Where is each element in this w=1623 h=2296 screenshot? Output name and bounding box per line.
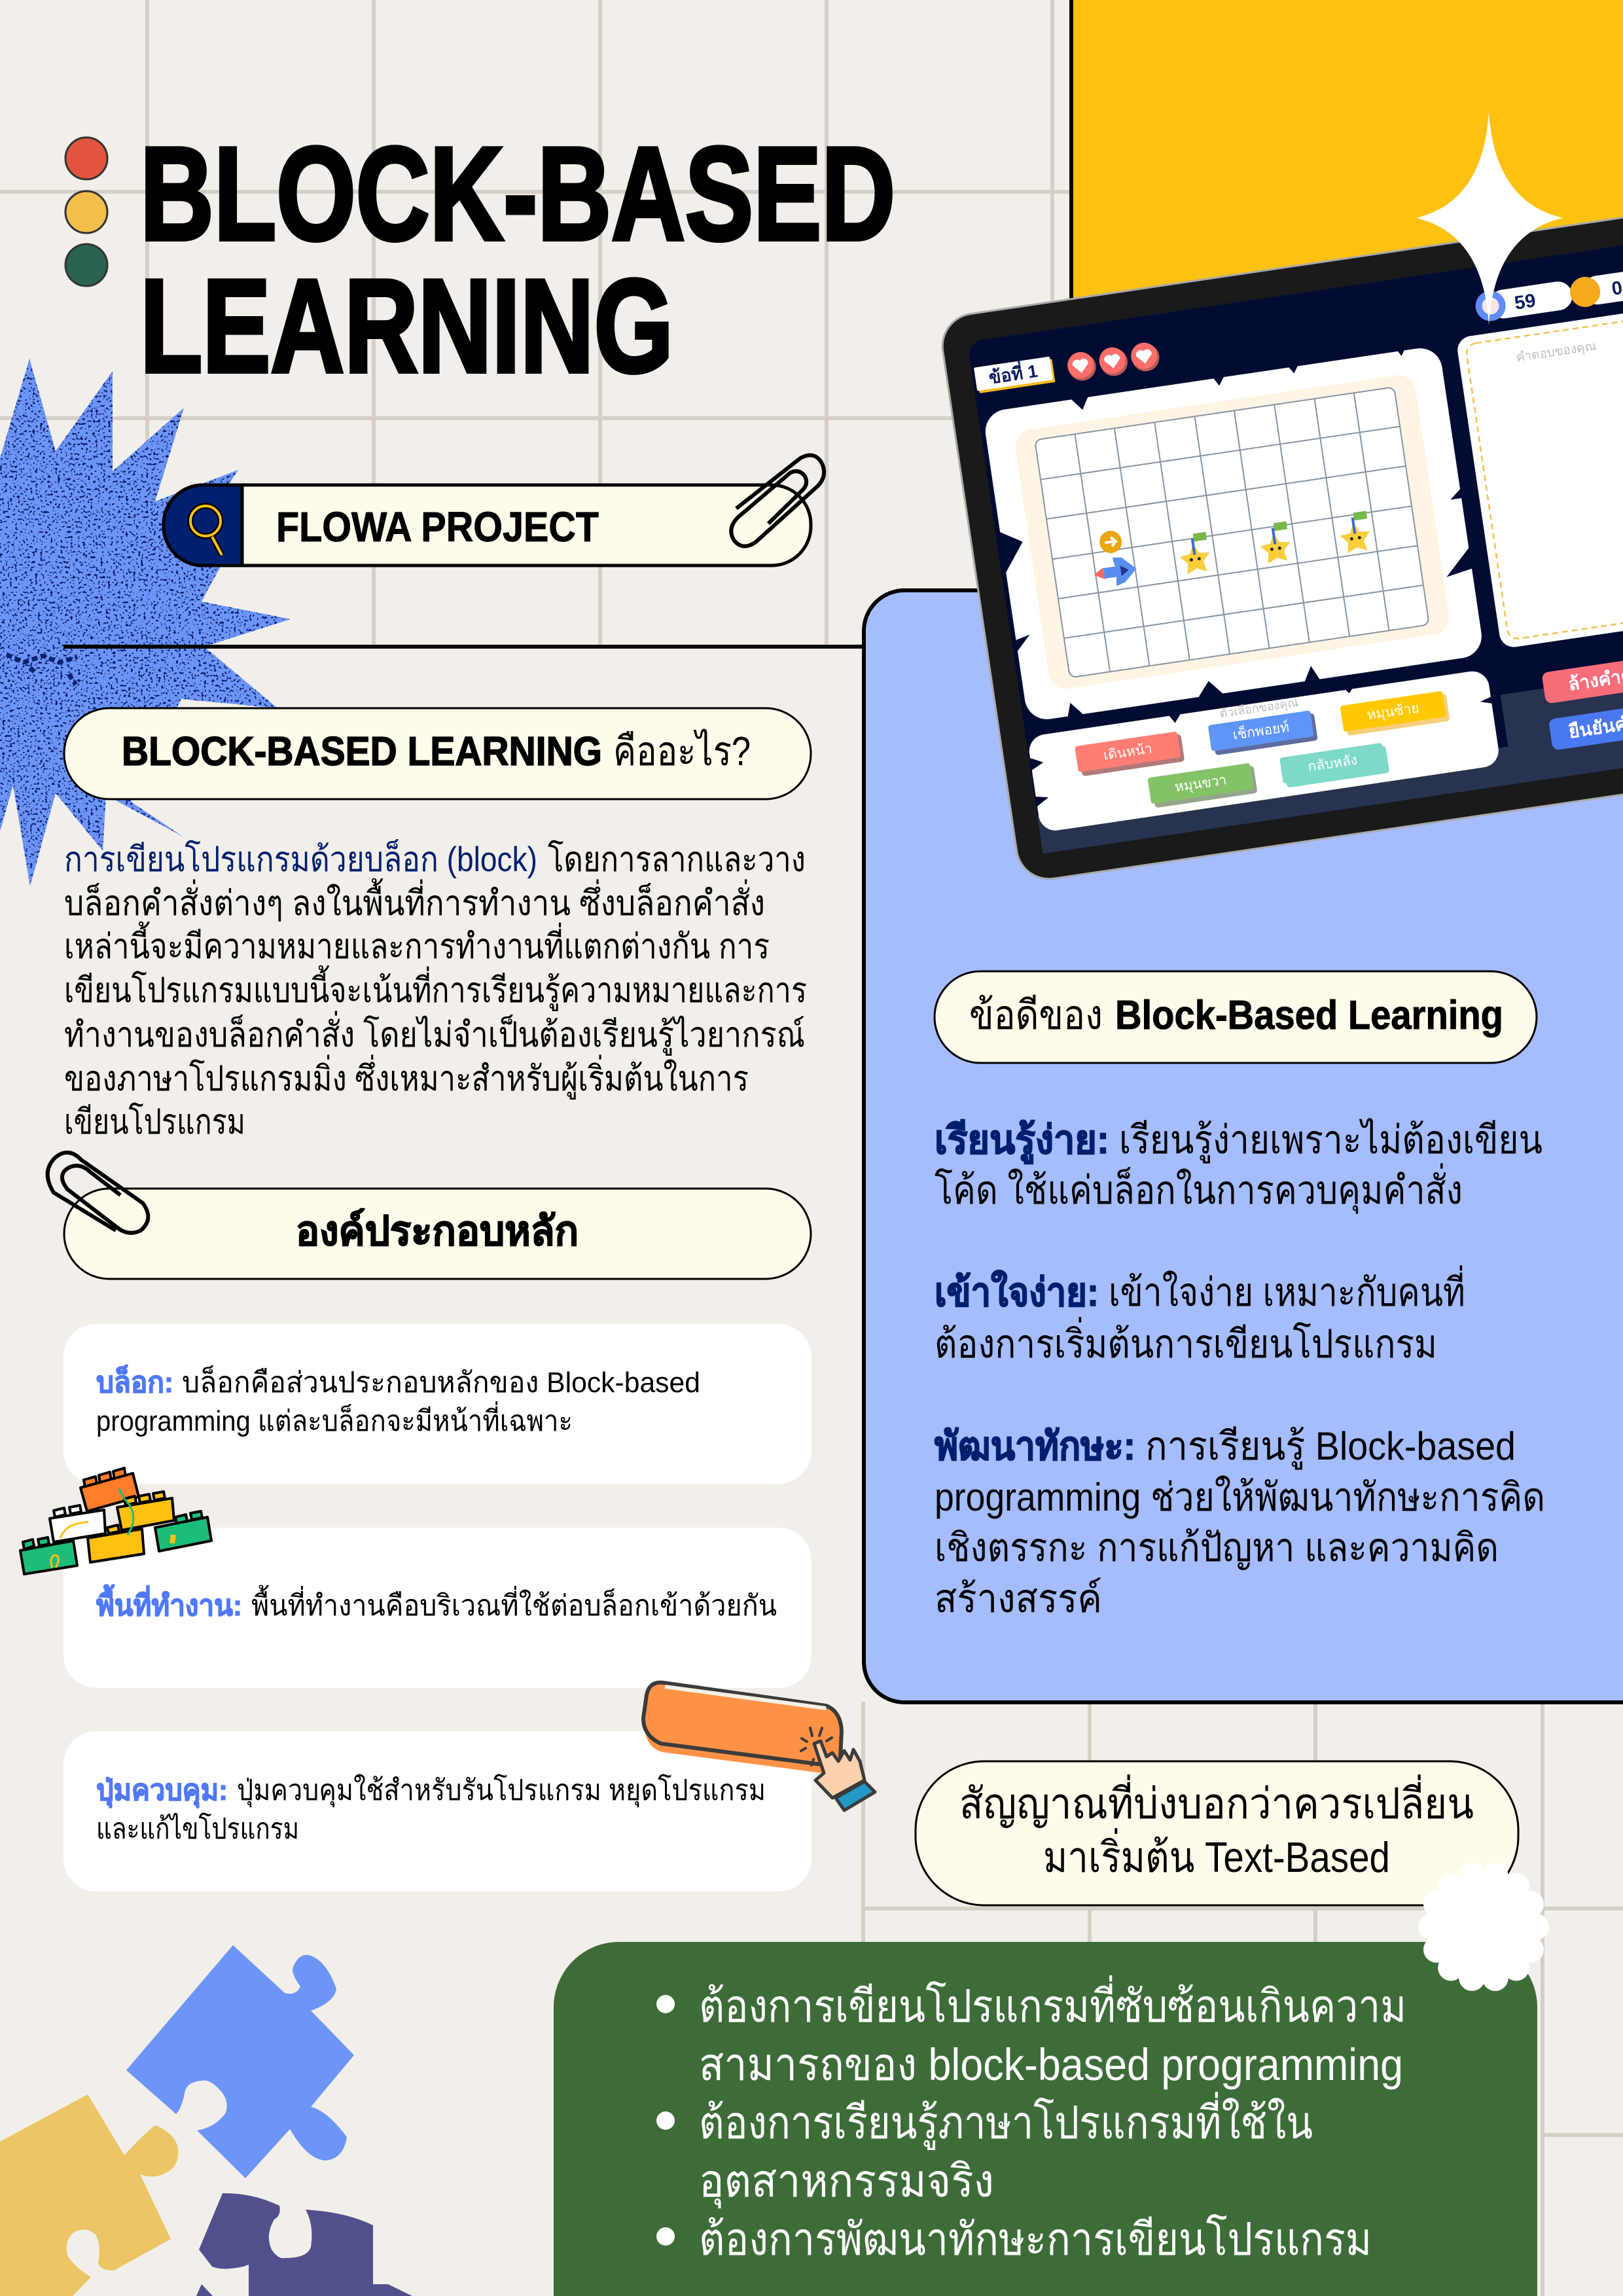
icon: star flag 3 <box>1337 511 1372 554</box>
advantage: develop skills: พัฒนาทักษะ: <box>935 1424 1135 1468</box>
option buttons: กลับหลัง <box>1307 753 1358 775</box>
divider line <box>63 645 865 649</box>
heading: signs to switch to text-based: สัญญาณที่บ่งบอกว่าควรเปลี่ยน <box>959 1774 1474 1828</box>
puzzle piece: blue <box>126 1945 354 2178</box>
title <box>140 120 895 401</box>
icon: rocket and arrow <box>1088 528 1139 589</box>
green panel: signs list: สามารถของ block-based programming <box>699 2039 1403 2090</box>
advantage: develop skills: สร้างสรรค์ <box>935 1577 1102 1621</box>
tablet mockup <box>938 177 1623 884</box>
timer and coin: 59 <box>1513 290 1537 314</box>
card: workspace <box>63 1528 812 1688</box>
yellow corner panel <box>1071 0 1623 399</box>
green panel: signs list: อุตสาหกรรมจริง <box>699 2156 994 2209</box>
brick: yellow top <box>117 1492 174 1530</box>
advantage: easy to learn: โค้ด ใช้แค่บล็อกในการควบคุมคำสั่ง <box>935 1163 1463 1214</box>
card: controls: ปุ่มควบคุมใช้สำหรับรันโปรแกรม หยุดโปรแกรม <box>237 1774 766 1808</box>
option buttons <box>1075 691 1456 818</box>
brick squiggles <box>51 1489 173 1568</box>
grid <box>1035 387 1429 677</box>
title: LEARNING <box>140 252 673 401</box>
brick: green right <box>155 1511 211 1551</box>
brick: green left <box>20 1537 77 1574</box>
description paragraph: เหล่านี้จะมีความหมายและการทำงานที่แตกต่างกัน การ <box>64 922 770 966</box>
heading: what is block-based learning: BLOCK-BASED LEARNING <box>122 729 602 774</box>
blue panel: advantages <box>864 590 1623 1702</box>
description paragraph: ของภาษาโปรแกรมมิ่ง ซึ่งเหมาะสำหรับผู้เริ่มต้นในการ <box>64 1054 749 1100</box>
blue starburst with speckled texture <box>0 359 291 886</box>
card: block: บล็อกคือส่วนประกอบหลักของ Block-based <box>182 1365 700 1399</box>
options panel: ตัวเลือกของคุณ <box>1219 696 1299 721</box>
hearts <box>1065 340 1161 383</box>
card: controls: และแก้ไขโปรแกรม <box>96 1812 299 1845</box>
card: block <box>63 1324 812 1484</box>
icon: star flag 1 <box>1177 532 1212 575</box>
brick: white <box>50 1505 105 1542</box>
heading: advantages of block-based learning: Block-Based Learning <box>1115 993 1503 1038</box>
heading: advantages of block-based learning: ข้อดีของ <box>969 993 1103 1038</box>
advantage: easy to understand: เข้าใจง่าย: <box>935 1270 1099 1314</box>
card: block: บล็อก: <box>96 1365 173 1399</box>
card: workspace: พื้นที่ทำงาน: <box>96 1584 242 1622</box>
search bar: FLOWA PROJECT: FLOWA PROJECT <box>276 503 599 550</box>
icon: white sparkle <box>1416 111 1563 325</box>
options panel <box>1026 664 1503 833</box>
description paragraph: บล็อกคำสั่งต่างๆ ลงในพื้นที่การทำงาน ซึ่งบล็อกคำสั่ง <box>64 878 765 923</box>
icon: paperclip left <box>48 1153 148 1233</box>
brick: orange <box>80 1468 139 1511</box>
puzzle piece: yellow <box>0 2094 178 2296</box>
game board panel <box>980 342 1488 725</box>
heading: main components <box>64 1189 811 1279</box>
icon: magnifier <box>190 506 222 555</box>
heading: signs to switch to text-based <box>916 1761 1518 1905</box>
advantage: easy to understand <box>935 1265 1465 1366</box>
card: workspace: พื้นที่ทำงานคือบริเวณที่ใช้ต่อบล็อกเข้าด้วยกัน <box>251 1585 777 1622</box>
advantage: easy to understand: ต้องการเริ่มต้นการเขียนโปรแกรม <box>935 1317 1437 1366</box>
option buttons: เช็กพอยท์ <box>1232 717 1290 743</box>
icon: toy bricks <box>20 1468 211 1574</box>
description paragraph: ทำงานของบล็อกคำสั่ง โดยไม่จำเป็นต้องเรียนรู้ไวยากรณ์ <box>64 1011 805 1056</box>
cuff <box>836 1782 875 1810</box>
advantage: easy to learn: เรียนรู้ง่าย: <box>935 1118 1109 1164</box>
heading: advantages of block-based learning <box>935 971 1537 1063</box>
title: BLOCK-BASED <box>140 120 895 268</box>
top bar: level tag <box>974 355 1056 393</box>
heading: what is block-based learning: คืออะไร? <box>613 728 751 774</box>
description paragraph <box>64 838 807 1141</box>
option buttons: หมุนซ้าย <box>1366 700 1420 724</box>
description paragraph: โดยการลากและวาง <box>548 840 806 879</box>
brick: yellow bottom <box>88 1525 144 1562</box>
advantage: develop skills: เชิงตรรกะ การแก้ปัญหา และความคิด <box>935 1526 1499 1570</box>
advantage: easy to learn: เรียนรู้ง่ายเพราะไม่ต้องเขียน <box>1119 1117 1543 1164</box>
green panel: signs list: ต้องการเขียนโปรแกรมที่ซับซ้อนเกินความ <box>699 1975 1406 2032</box>
description paragraph: เขียนโปรแกรม <box>64 1102 245 1141</box>
option buttons: หมุนขวา <box>1173 772 1228 796</box>
card: block: programming แต่ละบล็อกจะมีหน้าที่เฉพาะ <box>96 1401 573 1437</box>
puzzle piece: navy <box>196 2193 412 2296</box>
advantage: develop skills: การเรียนรู้ Block-based <box>1145 1424 1516 1470</box>
heading: what is block-based learning <box>64 708 811 799</box>
description paragraph: การเขียนโปรแกรมด้วยบล็อก (block) <box>64 838 537 879</box>
hand <box>814 1741 865 1798</box>
icon: paperclip top <box>731 456 824 547</box>
card: controls <box>63 1731 812 1892</box>
description paragraph: เขียนโปรแกรมแบบนี้จะเน้นที่การเรียนรู้ความหมายและการ <box>64 965 807 1011</box>
search bar: FLOWA PROJECT <box>164 485 811 565</box>
heading: main components: องค์ประกอบหลัก <box>296 1208 579 1254</box>
green panel: signs list <box>554 1942 1537 2296</box>
advantage: easy to understand: เข้าใจง่าย เหมาะกับคนที่ <box>1109 1265 1465 1314</box>
answer panel: คำตอบของคุณ <box>1516 340 1597 365</box>
clear and confirm buttons <box>1541 642 1623 751</box>
answer panel <box>1455 271 1623 649</box>
top bar: level tag: ข้อที่ 1 <box>987 358 1039 387</box>
heading: signs to switch to text-based: มาเริ่มต้น Text-Based <box>1043 1828 1390 1881</box>
traffic light dots <box>65 137 107 286</box>
icon: orange button with clicking hand <box>643 1683 875 1810</box>
option buttons: เดินหน้า <box>1102 741 1153 763</box>
advantage: easy to learn <box>935 1117 1543 1214</box>
timer and coin <box>1474 259 1623 323</box>
bullet list <box>656 1995 675 2013</box>
click marks <box>801 1728 832 1765</box>
green panel: signs list: ต้องการพัฒนาทักษะการเขียนโปรแกรม <box>699 2214 1372 2265</box>
advantage: develop skills: programming ช่วยให้พัฒนาทักษะการคิด <box>935 1475 1545 1519</box>
advantage: develop skills <box>935 1424 1545 1621</box>
white scalloped badge <box>1418 1863 1549 1991</box>
card: controls: ปุ่มควบคุม: <box>96 1774 228 1808</box>
icon: star flag 2 <box>1257 521 1293 564</box>
green panel: signs list: ต้องการเรียนรู้ภาษาโปรแกรมที่ใช้ใน <box>699 2092 1313 2150</box>
